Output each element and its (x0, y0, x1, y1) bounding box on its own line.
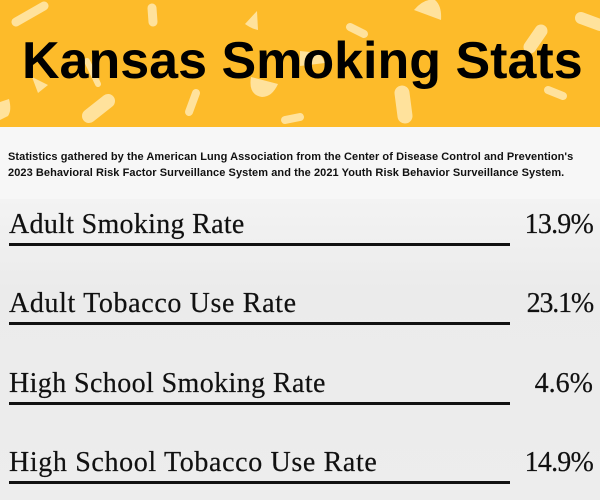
stat row: high school tobacco use rate: 14.9% (525, 447, 593, 478)
stat row: adult tobacco use rate (9, 288, 594, 325)
stat row: high school tobacco use rate (9, 447, 593, 484)
stats panel (0, 199, 600, 500)
intro text (8, 151, 573, 179)
confetti pattern (0, 0, 600, 124)
stat row: high school smoking rate: High School Smoking Rate (9, 368, 326, 399)
stat row: high school smoking rate: 4.6% (535, 368, 593, 399)
intro text panel (0, 127, 600, 199)
stat row: adult smoking rate: Adult Smoking Rate (9, 209, 245, 240)
stat row: high school smoking rate (9, 368, 593, 405)
header banner (0, 0, 600, 127)
intro text: Statistics gathered by the American Lung Association from the Center of Disease Control and Prevention's (8, 151, 573, 163)
title: Kansas Smoking Stats (22, 32, 583, 90)
stat row: adult tobacco use rate: Adult Tobacco Use Rate (9, 288, 297, 319)
stat row: adult tobacco use rate: 23.1% (527, 288, 593, 319)
stat row: adult smoking rate (9, 209, 593, 246)
intro text: 2023 Behavioral Risk Factor Surveillance System and the 2021 Youth Risk Behavior Surveillance System. (8, 167, 564, 179)
stat row: high school tobacco use rate: High School Tobacco Use Rate (9, 447, 377, 478)
stat row: adult smoking rate: 13.9% (525, 209, 593, 240)
